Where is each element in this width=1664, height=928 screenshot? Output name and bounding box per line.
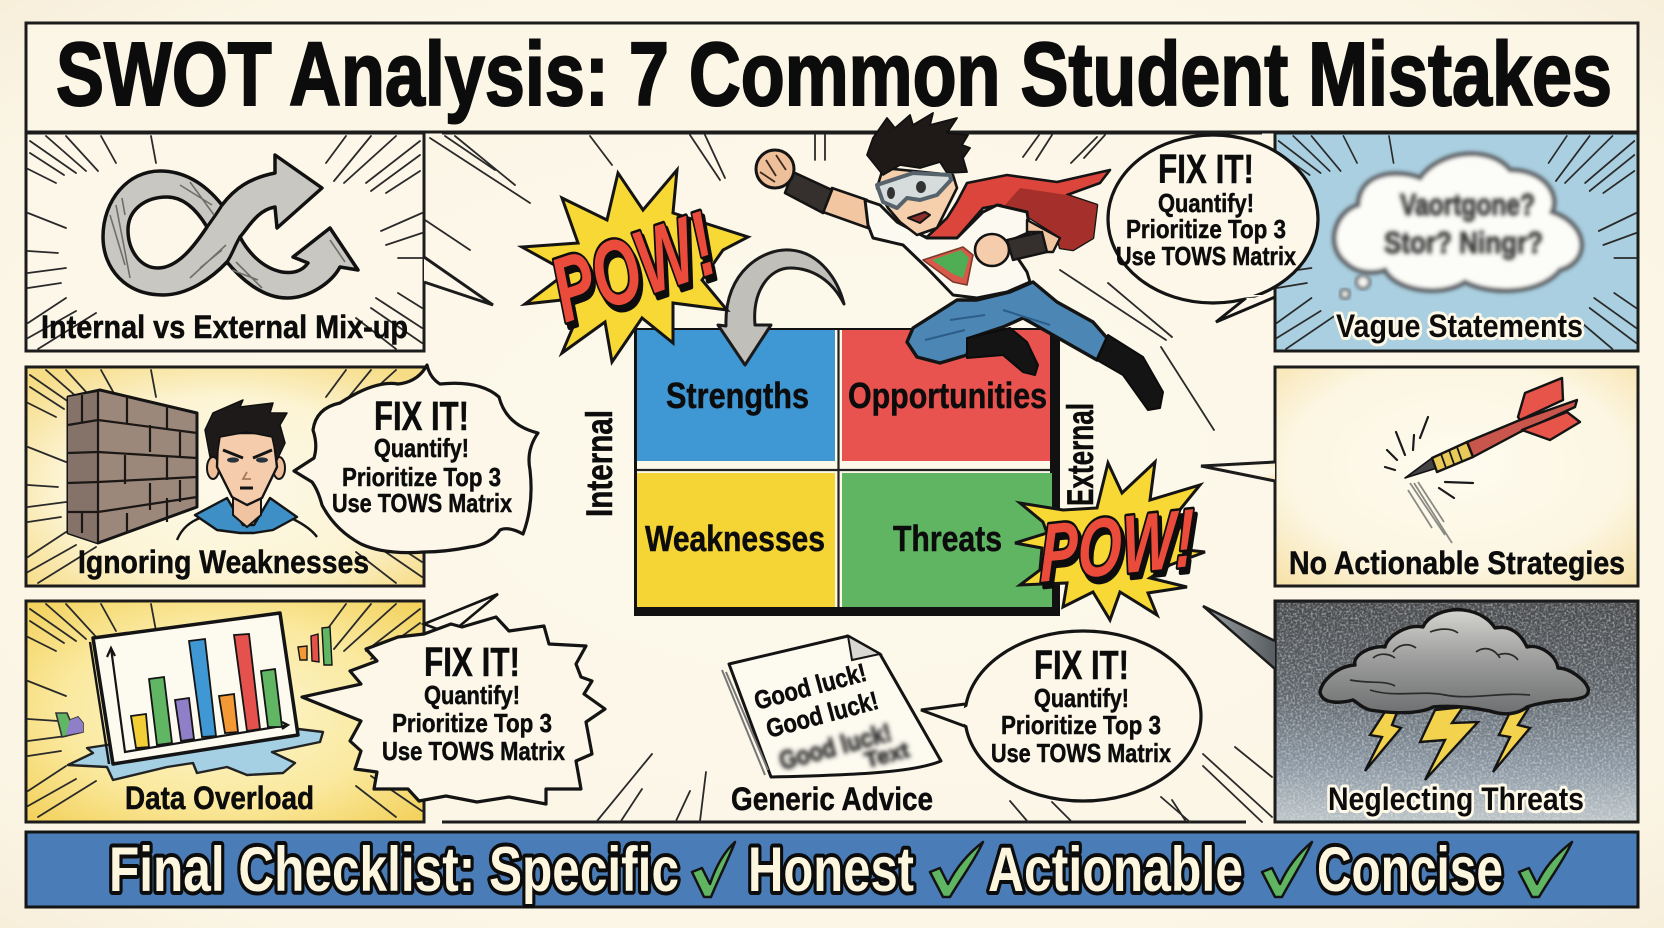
quadrant: Weaknesses — [637, 473, 835, 607]
note text: Good luck: Good luck! — [751, 657, 870, 716]
icon: tangled infinity arrows — [103, 155, 358, 298]
speech bubble: ignoring weaknesses — [294, 365, 538, 553]
panel: Generic Advice note: Good luck! — [763, 685, 882, 744]
burst bubble: data overload: Quantify! — [424, 680, 520, 710]
hero fist and wristband — [756, 150, 832, 213]
curved grey arrow into Strengths — [718, 250, 844, 365]
label: Vague Statements: Vague Statements — [1336, 308, 1583, 344]
panel: Ignoring Weaknesses — [26, 367, 424, 586]
speech bubble: generic advice: Quantify! — [1034, 683, 1129, 713]
label: Ignoring Weaknesses: Ignoring Weaknesses — [78, 544, 369, 580]
check mark — [930, 842, 983, 897]
quadrant: Strengths: Strengths — [666, 375, 809, 416]
POW burst: top left of matrix — [522, 170, 748, 362]
final checklist banner: Actionable — [988, 835, 1243, 905]
SWOT matrix — [634, 328, 1060, 616]
icon: lightning bolts — [1365, 707, 1530, 780]
speech bubble: generic advice — [921, 631, 1201, 801]
final checklist banner: Concise — [1317, 835, 1503, 905]
quadrant: Opportunities: Opportunities — [848, 375, 1047, 416]
icon: frowning student — [177, 400, 317, 540]
label: Neglecting Threats: Neglecting Threats — [1328, 781, 1584, 817]
burst bubble: data overload: Use TOWS Matrix — [382, 736, 565, 766]
panel: Vague Statements — [1275, 133, 1638, 351]
tail: panel 1 callout pointer — [424, 257, 493, 305]
panel: Generic Advice note — [722, 636, 941, 817]
burst bubble: data overload — [302, 594, 605, 804]
hero left jeans and boots — [907, 282, 1163, 410]
panel: Internal vs External Mix-up — [26, 133, 493, 351]
speech bubble: generic advice: Use TOWS Matrix — [991, 738, 1171, 768]
check mark — [1519, 842, 1572, 897]
check mark — [1262, 842, 1312, 897]
POW burst: lower right of matrix: POW! — [1040, 493, 1194, 600]
centre comic frame lines — [425, 133, 1272, 822]
quadrant: Threats: Threats — [893, 518, 1002, 559]
quadrant: Weaknesses: Weaknesses — [645, 518, 825, 559]
axis label: Internal: Internal — [579, 410, 620, 517]
POW burst: top left of matrix: POW! — [539, 193, 728, 342]
speech bubble: top right: FIX IT! — [1158, 146, 1254, 192]
panel: Neglecting Threats — [1203, 601, 1638, 822]
tail: panel 5 callout pointer — [1201, 462, 1275, 481]
speech bubble: ignoring weaknesses: Use TOWS Matrix — [332, 488, 512, 518]
superhero student — [756, 113, 1163, 410]
blurred thought text: Stor? Ningr? — [1384, 225, 1543, 260]
burst bubble: data overload: Prioritize Top 3 — [392, 708, 552, 738]
hero head — [867, 113, 970, 235]
icon: blurry thought cloud — [1334, 154, 1582, 298]
axis label: External: External — [1060, 403, 1101, 506]
hero chest logo — [923, 247, 973, 285]
icon: overflowing bar chart — [56, 613, 332, 780]
tail: panel 7 callout pointer — [1203, 606, 1275, 669]
panel: No Actionable Strategies — [1201, 367, 1638, 586]
final checklist banner — [26, 832, 1638, 907]
final checklist banner: Honest — [748, 835, 914, 905]
blurred thought text — [1384, 187, 1543, 260]
hero shirt — [865, 200, 1030, 298]
speech bubble: top right: Prioritize Top 3 — [1126, 214, 1286, 244]
quadrant: Strengths — [637, 330, 835, 461]
blurred thought text: Vaortgone? — [1400, 187, 1535, 222]
speech bubble: top right: Use TOWS Matrix — [1116, 241, 1296, 271]
speech bubble: top right: Quantify! — [1158, 188, 1254, 218]
burst bubble: data overload: FIX IT! — [424, 639, 520, 685]
speech bubble: generic advice: Prioritize Top 3 — [1001, 710, 1161, 740]
icon: dart missing its target — [1385, 378, 1580, 543]
icon: brick wall — [68, 390, 197, 543]
hero cape — [893, 170, 1110, 250]
speech bubble: ignoring weaknesses: Prioritize Top 3 — [342, 462, 501, 492]
label: Data Overload: Data Overload — [125, 780, 314, 816]
final checklist banner: Final Checklist: Specific — [109, 835, 679, 905]
POW burst: lower right of matrix — [1015, 462, 1205, 620]
label: Generic Advice: Generic Advice — [731, 781, 933, 817]
quadrant: Opportunities — [842, 330, 1050, 461]
icon: curled paper note — [722, 636, 941, 777]
icon: storm cloud — [1320, 610, 1588, 714]
hero bent arm — [1027, 220, 1060, 252]
quadrant: Threats — [842, 473, 1052, 607]
label: Internal vs External Mix-up: Internal vs External Mix-up — [41, 309, 408, 345]
speech bubble: top right — [1108, 135, 1318, 322]
speech bubble: generic advice: FIX IT! — [1034, 642, 1129, 688]
blurred note text: Good luck! — [776, 717, 895, 776]
label: No Actionable Strategies: No Actionable Strategies — [1289, 545, 1625, 581]
speech bubble: ignoring weaknesses: Quantify! — [374, 433, 469, 463]
hero extended arm — [823, 188, 868, 228]
panel: Data Overload — [26, 601, 424, 822]
blurred note text: Text — [862, 737, 912, 773]
check mark — [692, 842, 735, 897]
speech bubble: ignoring weaknesses: FIX IT! — [374, 393, 469, 439]
